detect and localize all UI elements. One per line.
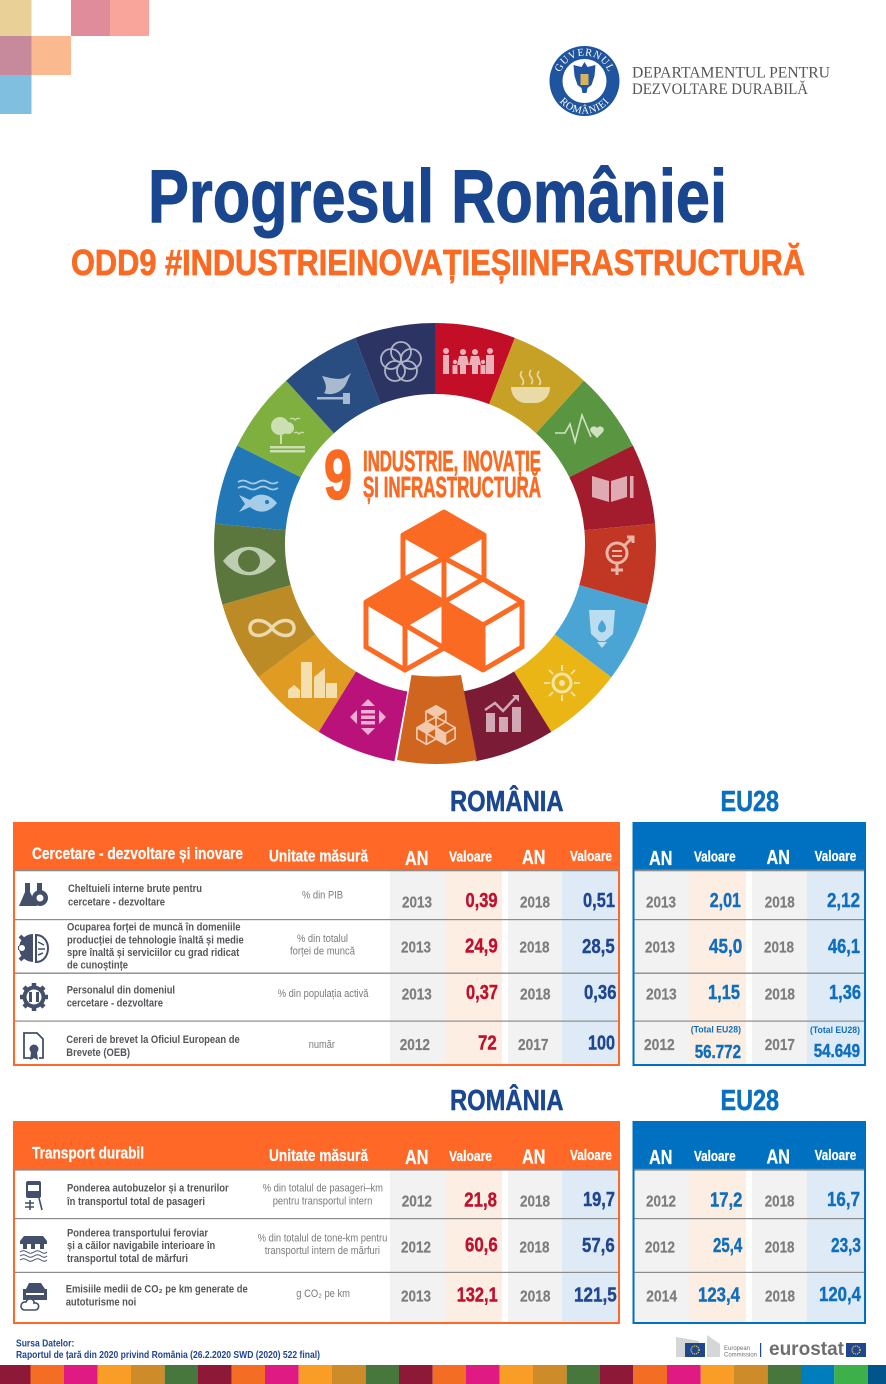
SDG wheel	[214, 323, 656, 764]
row: research spending: 2018	[520, 894, 550, 912]
table header labels: Valoare	[570, 1148, 612, 1164]
row: high-tech employment: spre înaltă și serviciilor cu grad ridicat	[67, 947, 240, 959]
row: personnel values: 1,36	[829, 982, 861, 1004]
icon: arrows	[350, 699, 386, 735]
row: research spending: % din PIB	[302, 890, 343, 902]
row: freight values	[645, 1235, 861, 1257]
row: passenger values: 16,7	[827, 1189, 860, 1211]
table header labels: Valoare	[449, 1149, 492, 1165]
row: patents	[66, 1033, 615, 1059]
row: CO2 emissions	[66, 1283, 617, 1308]
row: passenger transport: 19,7	[583, 1189, 615, 1211]
row: freight transport: transportul intern de mărfuri	[265, 1245, 380, 1257]
row: freight values: 23,3	[831, 1235, 861, 1257]
table header labels: Transport durabil	[32, 1143, 144, 1162]
heading: România 1: ROMÂNIA	[450, 784, 564, 818]
row: CO2 values	[646, 1284, 862, 1307]
table header labels: AN	[522, 847, 546, 869]
row: patents values: (Total EU28)	[810, 1025, 860, 1036]
table header labels: Valoare	[815, 1148, 856, 1164]
row: high-tech employment: 24,9	[465, 936, 498, 958]
table header labels: AN	[405, 1147, 428, 1169]
row: passenger transport: 2012	[402, 1194, 432, 1211]
table header labels: Cercetare - dezvoltare și inovare	[32, 844, 243, 863]
logo: European Commission: Commission	[724, 1352, 757, 1358]
icon: dove and gavel	[317, 373, 351, 404]
row: research spending values	[646, 890, 860, 912]
row: CO2 values: 123,4	[698, 1285, 741, 1307]
logo: government seal	[550, 46, 620, 116]
row: patents: 100	[588, 1033, 615, 1055]
row: freight values: 25,4	[713, 1235, 743, 1257]
table header labels: Unitate măsură	[269, 1146, 368, 1165]
table header labels: AN	[405, 848, 428, 870]
row: high-tech employment: de cunoștințe	[67, 960, 128, 972]
row: high-tech employment: 2018	[520, 940, 550, 957]
bottom colour strip	[0, 1365, 886, 1384]
row: passenger transport: % din totalul de pasageri–km	[263, 1183, 383, 1195]
goal name: ȘI INFRASTRUCTURĂ	[363, 471, 541, 504]
row: freight transport: 57,6	[582, 1235, 615, 1257]
icon: bowl	[511, 370, 550, 403]
row: research spending values: 2013	[646, 894, 676, 912]
table header labels	[649, 847, 856, 870]
row: passenger values: 2012	[646, 1194, 676, 1211]
row: research personnel: % din populația activă	[278, 988, 369, 1000]
row: personnel values: 1,15	[708, 982, 740, 1004]
row: research personnel: 2018	[520, 987, 551, 1004]
row: freight transport: 60,6	[465, 1235, 498, 1257]
row: high-tech employment: producției de tehnologie înaltă și medie	[67, 934, 244, 946]
row: employment values: 2018	[764, 940, 794, 957]
icon: growth chart	[485, 695, 521, 732]
heading: România 2: ROMÂNIA	[450, 1083, 564, 1117]
row: research spending: 0,39	[466, 890, 498, 912]
department name: DEPARTAMENTUL PENTRU	[632, 64, 830, 82]
logo: European Commission: European	[724, 1345, 750, 1352]
row: passenger transport: pentru transportul intern	[273, 1195, 372, 1207]
row: freight transport: % din totalul de tone-km pentru	[258, 1233, 387, 1245]
row: CO2 values: 120,4	[819, 1284, 862, 1306]
row: patents: 2012	[400, 1037, 430, 1054]
row: patents: 2017	[518, 1037, 549, 1054]
table header labels: Valoare	[694, 850, 736, 866]
icon: flasks	[19, 883, 48, 906]
row: patents values: (Total EU28)	[691, 1025, 741, 1036]
table header labels	[32, 1143, 612, 1169]
table header labels	[649, 1146, 856, 1169]
wheel segments	[214, 323, 656, 764]
data source note	[16, 1339, 320, 1361]
icon: gear with people	[20, 983, 48, 1011]
row: high-tech employment: forței de muncă	[290, 946, 356, 958]
row: patents: Brevete (OEB)	[66, 1047, 130, 1059]
table header labels: AN	[522, 1146, 546, 1168]
row: patents values: 2017	[765, 1037, 795, 1054]
data source note: Sursa Datelor:	[16, 1339, 74, 1350]
row: CO2 values: 2014	[646, 1289, 677, 1306]
row: passenger values: 17,2	[710, 1190, 742, 1212]
table header labels: AN	[766, 1146, 790, 1168]
row: CO2 emissions: Emisiile medii de CO₂ pe km generate de	[66, 1283, 248, 1295]
row: employment values	[645, 936, 860, 958]
goal name	[363, 446, 541, 504]
row: personnel values	[646, 982, 861, 1004]
table header labels: Valoare	[815, 849, 856, 865]
row: research personnel: 2013	[402, 987, 432, 1004]
icon: heartbeat	[555, 415, 604, 442]
row: passenger transport: 2018	[520, 1194, 550, 1211]
row: passenger values: 2018	[765, 1194, 795, 1211]
row: research spending values: 2018	[765, 894, 795, 912]
icon: sun	[544, 665, 580, 701]
panel: EU28 transport table	[632, 1121, 866, 1324]
icon: family	[443, 348, 494, 374]
row: research spending: 0,51	[583, 890, 615, 912]
row: CO2 emissions: 2013	[401, 1289, 431, 1306]
row: freight values: 2012	[645, 1239, 675, 1256]
icon: bus and rail	[25, 1181, 42, 1210]
table header labels: Valoare	[694, 1149, 736, 1165]
icon: city	[288, 662, 337, 698]
heading: EU28 1: EU28	[720, 786, 779, 818]
row: freight transport: 2018	[520, 1239, 550, 1256]
icon: cubes small	[417, 706, 455, 744]
row: research spending: Cheltuieli interne brute pentru	[68, 883, 202, 895]
panel: Romania research table	[13, 822, 620, 1066]
row: research personnel	[67, 982, 616, 1010]
row: employment values: 2013	[645, 940, 675, 957]
row: freight transport: 2012	[401, 1239, 431, 1256]
row: personnel values: 2013	[646, 987, 677, 1004]
table header labels: Valoare	[449, 850, 492, 866]
logo: eurostat: eurostat	[769, 1339, 845, 1360]
row: patents: 72	[478, 1033, 497, 1055]
department name: DEZVOLTARE DURABILĂ	[632, 81, 809, 98]
goal name: INDUSTRIE, INOVAȚIE	[363, 446, 541, 478]
icon: patent document	[24, 1033, 43, 1060]
panel: EU28 research table	[632, 822, 866, 1066]
row: passenger transport: Ponderea autobuzelor și a trenurilor	[67, 1183, 229, 1195]
row: CO2 emissions: 121,5	[574, 1285, 617, 1307]
icon: eye	[223, 547, 276, 575]
row: high-tech employment: % din totalul	[297, 933, 348, 945]
panel: Romania transport table	[13, 1121, 620, 1324]
row: CO2 emissions: g CO₂ pe km	[296, 1288, 350, 1300]
icon: tree and birds	[270, 417, 305, 452]
row: employment values: 45,0	[709, 936, 742, 958]
icon: fish	[238, 480, 278, 512]
row: CO2 emissions: 132,1	[457, 1285, 498, 1307]
logo: European Commission	[676, 1335, 761, 1358]
row: patents: Cereri de brevet la Oficiul European de	[66, 1034, 240, 1046]
row: freight transport: și a căilor navigabile interioare în	[67, 1240, 216, 1252]
row: freight transport	[67, 1228, 615, 1265]
row: research spending: cercetare - dezvoltare	[68, 896, 165, 908]
department name	[632, 64, 830, 98]
row: research spending	[68, 883, 615, 912]
row: CO2 emissions: 2018	[520, 1289, 551, 1306]
row: research spending: 2013	[402, 894, 432, 912]
row: research personnel: Personalul din domeniul	[67, 985, 175, 997]
row: CO2 values: 2018	[765, 1289, 795, 1306]
heading: EU28 2: EU28	[720, 1085, 779, 1117]
row: research personnel: 0,36	[584, 982, 616, 1004]
table header labels	[32, 844, 612, 870]
row: patents values	[644, 1025, 860, 1062]
row: employment values: 46,1	[828, 936, 860, 958]
icon: rings	[381, 342, 421, 381]
icon: water	[589, 610, 615, 648]
row: research spending values: 2,12	[827, 890, 860, 912]
row: passenger transport: 21,8	[464, 1190, 497, 1212]
row: research spending values: 2,01	[710, 890, 741, 912]
icon: bridge and waves	[20, 1236, 47, 1261]
row: patents values: 54.649	[814, 1041, 860, 1061]
row: high-tech employment: 28,5	[582, 936, 615, 958]
row: freight transport: Ponderea transportului feroviar	[67, 1228, 209, 1240]
icon: car and cloud	[21, 1283, 47, 1310]
row: high-tech employment	[67, 922, 615, 972]
row: research personnel: 0,37	[466, 982, 498, 1004]
data source note: Raportul de țară din 2020 privind România (26.2.2020 SWD (2020) 522 final)	[16, 1350, 320, 1361]
row: passenger transport: în transportul total de pasageri	[66, 1196, 205, 1208]
table header labels: Valoare	[570, 849, 612, 865]
row: personnel values: 2018	[765, 987, 795, 1004]
icon: gender	[607, 537, 633, 575]
decorative corner squares	[0, 0, 149, 114]
row: passenger transport	[66, 1183, 615, 1212]
row: CO2 emissions: autoturisme noi	[66, 1296, 136, 1308]
icon: infinity	[250, 620, 294, 636]
row: research personnel: cercetare - dezvoltare	[67, 998, 163, 1010]
row: patents: număr	[309, 1039, 335, 1051]
title: Progresul României	[148, 154, 727, 238]
table header labels: Unitate măsură	[269, 846, 368, 866]
icon: book	[592, 476, 634, 502]
row: freight transport: transportul total de mărfuri	[67, 1253, 188, 1265]
row: passenger values	[646, 1189, 860, 1212]
logo: government seal: GUVERNUL	[555, 48, 614, 72]
icon: gear and brain	[18, 934, 48, 962]
row: patents values: 2012	[644, 1037, 675, 1054]
logo: government seal: ROMÂNIEI	[560, 97, 609, 114]
row: high-tech employment: 2013	[401, 940, 431, 957]
table header labels: AN	[766, 847, 790, 869]
goal number: 9	[324, 436, 352, 514]
table header labels: AN	[649, 848, 672, 870]
row: freight values: 2018	[765, 1239, 795, 1256]
icon: central cubes	[366, 512, 522, 670]
row: high-tech employment: Ocuparea forței de muncă în domeniile	[67, 922, 240, 934]
row: patents values: 56.772	[695, 1042, 741, 1062]
table header labels: AN	[649, 1147, 672, 1169]
